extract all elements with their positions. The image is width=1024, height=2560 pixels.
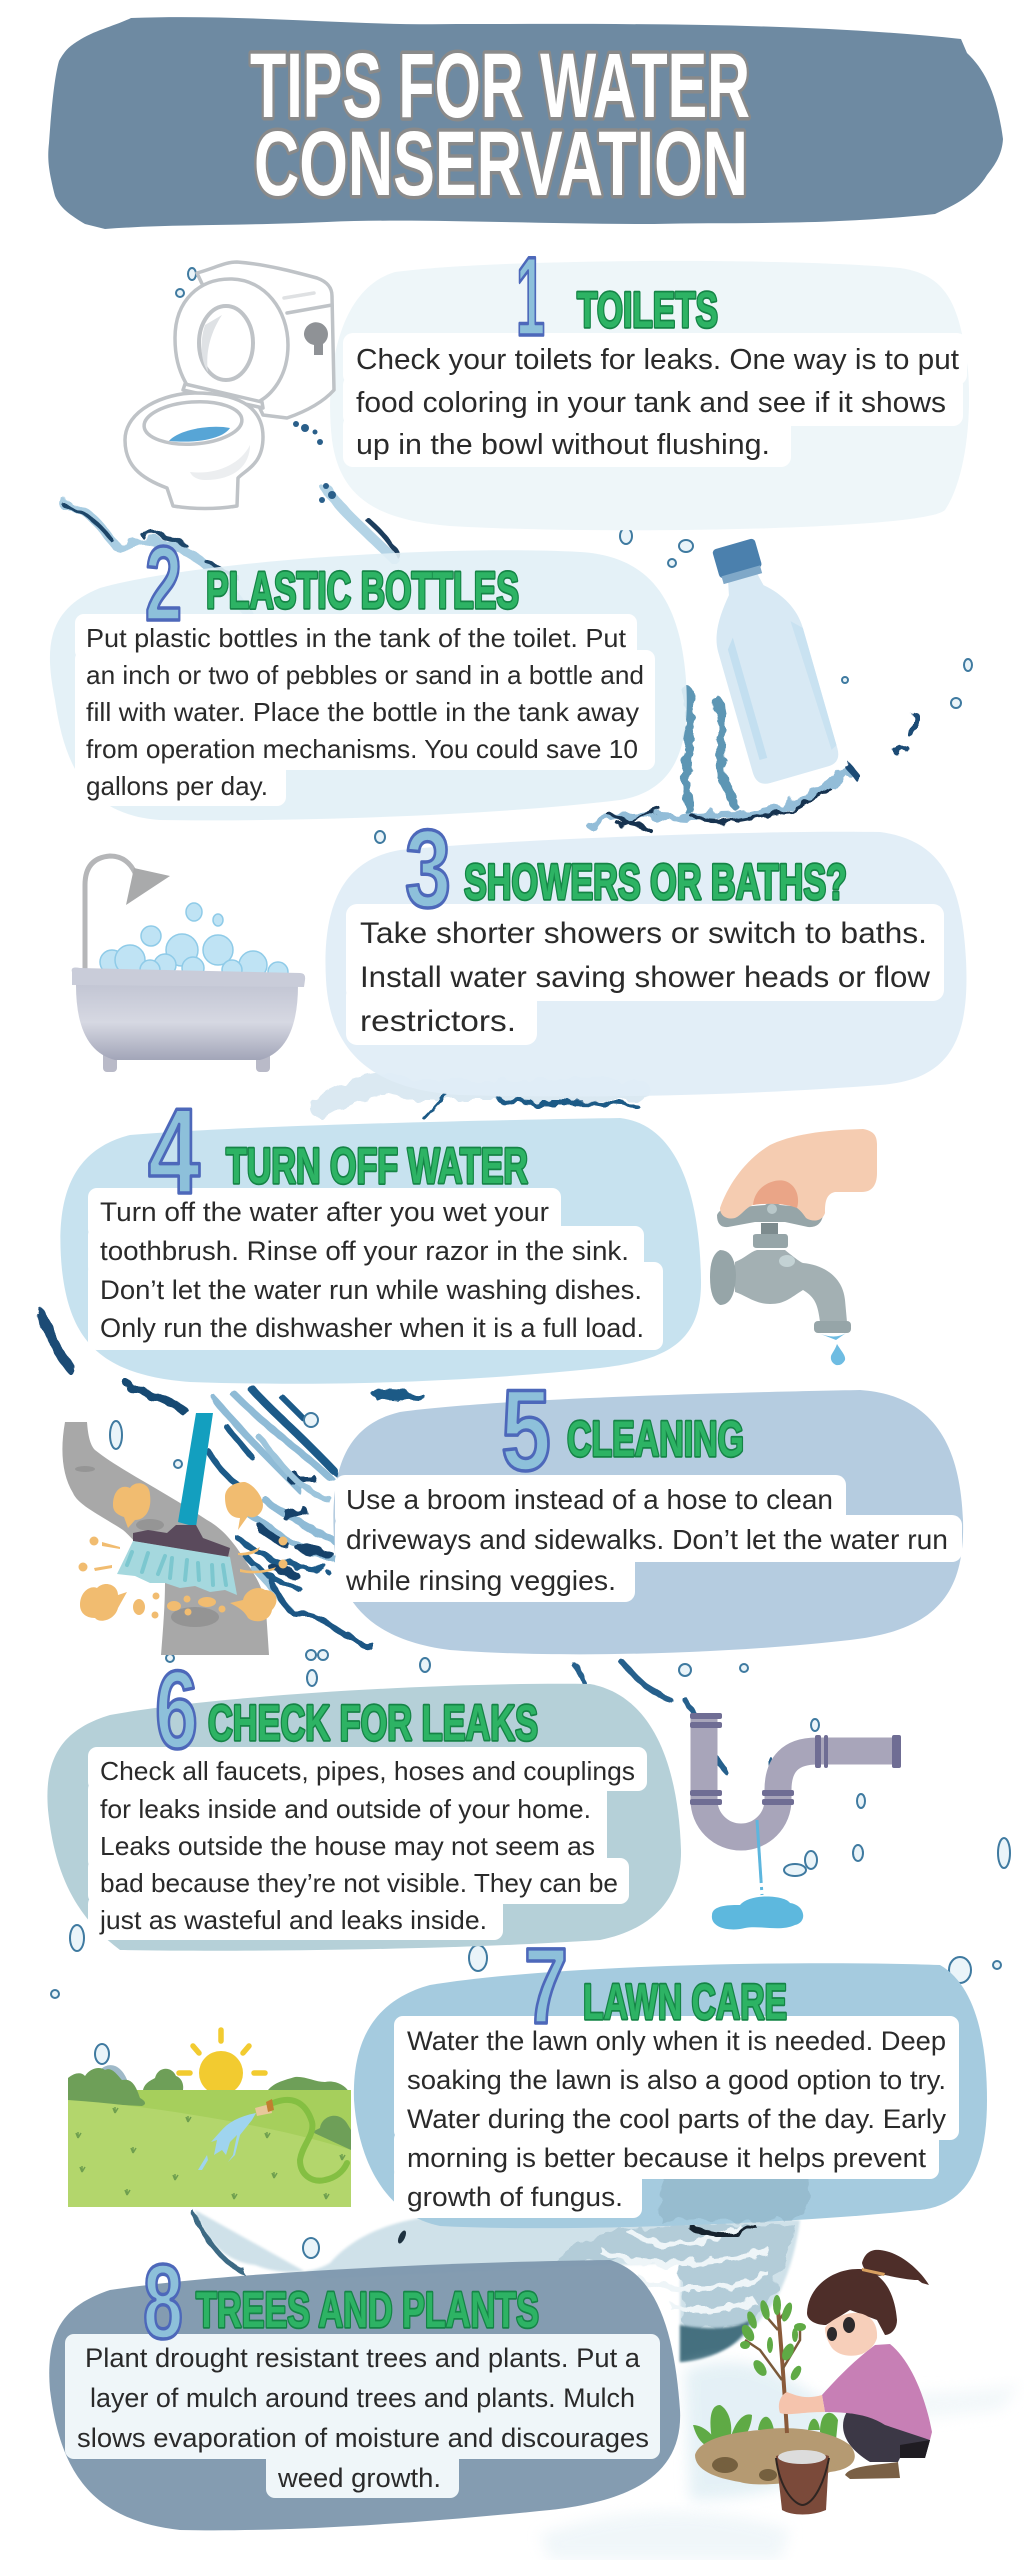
heading: turn off water: TURN OFF WATER	[226, 1138, 528, 1194]
body text: trees and plants: weed growth.	[277, 2463, 441, 2493]
splash showing through panel	[659, 2165, 809, 2222]
body text: toilets: Check your toilets for leaks. One way is to put	[356, 344, 959, 376]
text background: 5	[335, 1475, 962, 1602]
panel: 6 check for leaks	[47, 1649, 681, 1951]
body text: lawn care: Water the lawn only when it is needed. Deep	[407, 2026, 946, 2056]
body text: lawn care: growth of fungus.	[407, 2182, 623, 2212]
body text: check for leaks: Check all faucets, pipes, hoses and couplings	[100, 1756, 635, 1786]
body text: lawn care: soaking the lawn is also a good option to try.	[407, 2065, 946, 2095]
body text: showers: Take shorter showers or switch to baths.	[360, 917, 927, 950]
icon: bathtub with shower	[72, 856, 305, 1072]
body text: cleaning: driveways and sidewalks. Don’t let the water run	[346, 1524, 948, 1555]
heading: toilets: TOILETS	[577, 282, 718, 338]
title text	[250, 35, 750, 215]
heading: cleaning: CLEANING	[567, 1411, 744, 1467]
body text: showers: Install water saving shower heads or flow	[360, 961, 930, 994]
panel: 5 cleaning	[333, 1367, 963, 1654]
body text: showers	[360, 917, 930, 1038]
text background: 4	[88, 1188, 663, 1350]
body text: plastic bottles: from operation mechanisms. You could save 10	[86, 734, 638, 764]
heading: showers or baths: SHOWERS OR BATHS?	[464, 854, 847, 910]
illustration: girl planting tree	[693, 2250, 932, 2514]
title banner	[48, 17, 1003, 229]
body text: turn off water: Turn off the water after you wet your	[100, 1197, 549, 1227]
panel: 7 lawn care	[354, 1925, 987, 2228]
body text: trees and plants: Plant drought resistant trees and plants. Put a	[85, 2343, 641, 2373]
body text: turn off water: toothbrush. Rinse off your razor in the sink.	[100, 1236, 629, 1266]
panel: 4 turn off water	[60, 1083, 701, 1384]
icon: broom sweeping road	[62, 1413, 287, 1655]
panel: 1 toilets: 1	[516, 234, 545, 359]
heading: trees and plants: TREES AND PLANTS	[196, 2282, 539, 2338]
body text: plastic bottles	[86, 623, 644, 801]
icon: toilet	[125, 262, 334, 508]
body text: lawn care: Water during the cool parts of the day. Early	[407, 2104, 947, 2134]
body text: plastic bottles: Put plastic bottles in the tank of the toilet. Put	[86, 623, 627, 653]
body text: cleaning: while rinsing veggies.	[345, 1565, 616, 1596]
number 8: 8	[143, 2243, 183, 2361]
title text: CONSERVATION	[254, 113, 748, 215]
body text: trees and plants: layer of mulch around trees and plants. Mulch	[90, 2383, 635, 2413]
text background: 8	[65, 2334, 660, 2498]
body text: toilets: up in the bowl without flushing.	[356, 429, 770, 461]
body text: check for leaks: for leaks inside and outside of your home.	[100, 1794, 591, 1824]
number 4: 4	[148, 1083, 200, 1219]
body text: plastic bottles: gallons per day.	[86, 771, 268, 801]
text background: 3	[346, 904, 944, 1045]
panel: 1 toilets	[330, 234, 969, 530]
text background: 1	[343, 333, 967, 467]
icon: water puddle	[712, 1896, 803, 1929]
number 3: 3	[405, 808, 451, 931]
body text: lawn care	[407, 2026, 947, 2212]
body text: turn off water	[100, 1197, 644, 1343]
body text: check for leaks	[99, 1756, 635, 1935]
heading: check for leaks: CHECK FOR LEAKS	[208, 1695, 538, 1751]
body text: plastic bottles: an inch or two of pebbles or sand in a bottle and	[86, 660, 644, 690]
body text: lawn care: morning is better because it helps prevent	[407, 2143, 927, 2173]
number 7: 7	[524, 1925, 568, 2046]
heading: plastic bottles: PLASTIC BOTTLES	[206, 562, 519, 620]
body text: check for leaks: Leaks outside the house may not seem as	[100, 1831, 595, 1861]
body text: turn off water: Only run the dishwasher when it is a full load.	[100, 1313, 644, 1343]
text background: 7	[394, 2016, 959, 2218]
text background: 6	[88, 1747, 647, 1940]
body text: plastic bottles: fill with water. Place the bottle in the tank away	[86, 697, 639, 727]
panel: 8 trees and plants	[49, 2243, 680, 2530]
number 6: 6	[155, 1649, 198, 1772]
heading: lawn care: LAWN CARE	[583, 1974, 787, 2030]
body text: check for leaks: bad because they’re not visible. They can be	[100, 1868, 618, 1898]
panel: 2 plastic bottles	[50, 525, 687, 820]
body text: cleaning: Use a broom instead of a hose to clean	[346, 1484, 833, 1515]
body text: toilets: food coloring in your tank and see if it shows	[356, 387, 946, 419]
body text: cleaning	[345, 1484, 948, 1596]
body text: toilets	[356, 344, 959, 461]
title text: TIPS FOR WATER	[250, 35, 750, 137]
body text: turn off water: Don’t let the water run while washing dishes.	[100, 1275, 642, 1305]
text background: 2	[75, 614, 655, 806]
body text: trees and plants: slows evaporation of moisture and discourages	[77, 2423, 649, 2453]
number 2: 2	[145, 525, 182, 643]
illustration: lawn with sun and hose	[68, 2030, 351, 2207]
icon: water bottle	[691, 532, 841, 787]
body text: trees and plants	[77, 2343, 649, 2493]
icon: leaking pipe	[690, 1713, 901, 1929]
body text: check for leaks: just as wasteful and leaks inside.	[99, 1905, 487, 1935]
panel: 3 showers or baths	[325, 808, 966, 1097]
body text: showers: restrictors.	[360, 1005, 516, 1038]
number 5: 5	[501, 1367, 551, 1495]
icon: hand on faucet	[710, 1129, 877, 1365]
